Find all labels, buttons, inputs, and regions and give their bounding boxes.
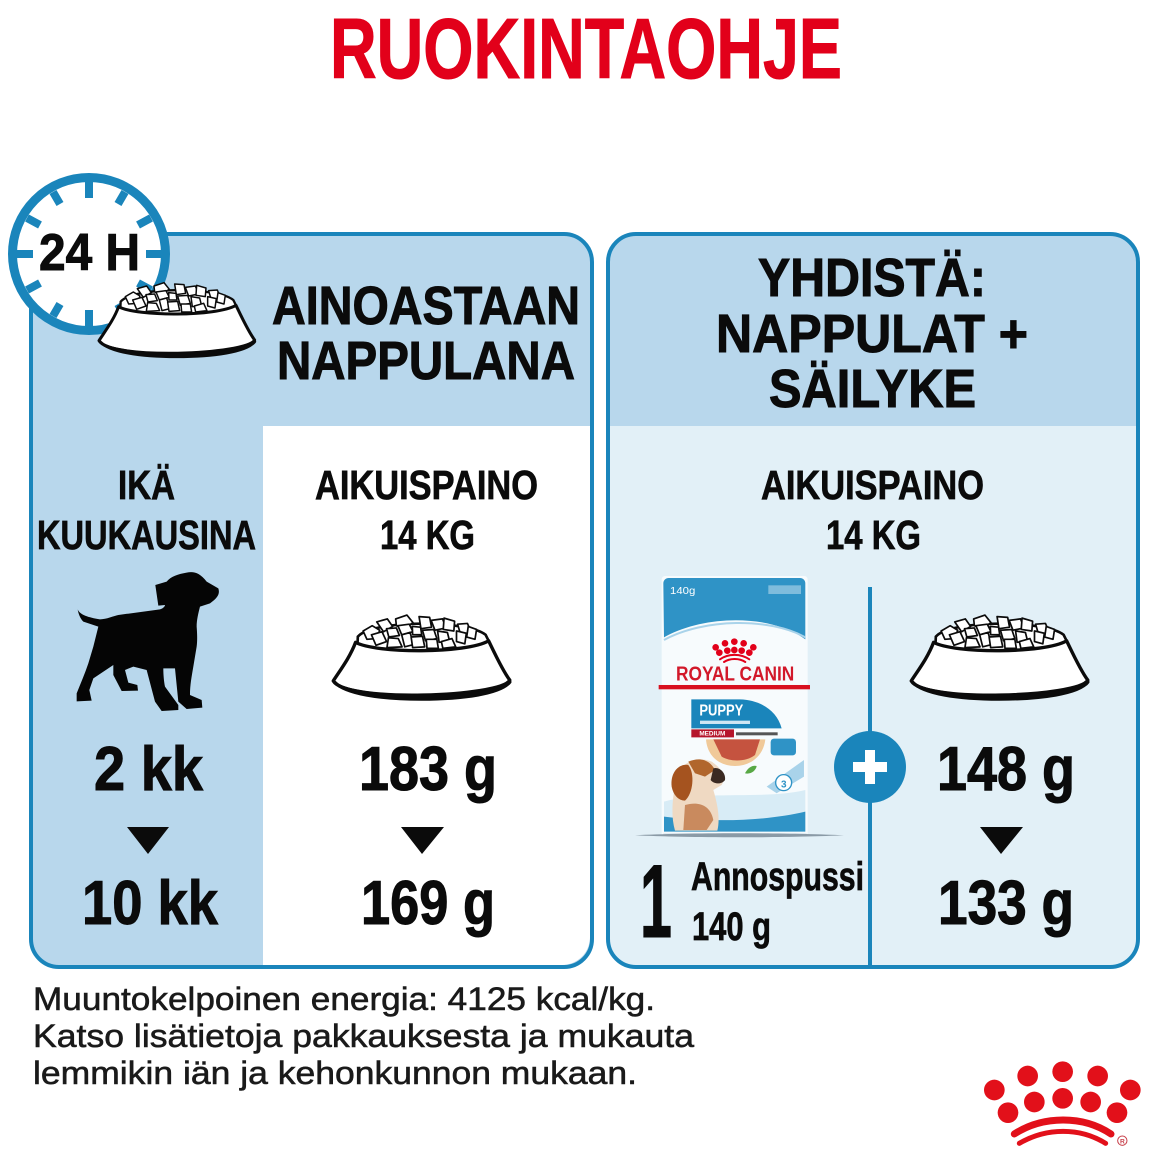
adult weight heading: mixed <box>761 462 984 558</box>
wet food pouch: ROYAL CANIN <box>676 663 794 686</box>
kibble amounts mixed <box>937 735 1075 938</box>
age values: 2 kk <box>94 735 203 804</box>
heading: mixed feeding: SÄILYKE <box>769 359 976 419</box>
pouch quantity label: 140 g <box>692 905 771 949</box>
title: RUOKINTAOHJE <box>330 2 842 97</box>
icon: food bowl mixed <box>911 615 1088 699</box>
heading: mixed feeding: NAPPULAT + <box>716 304 1028 364</box>
icon: puppy silhouette <box>77 572 219 711</box>
age values: 10 kk <box>82 869 218 938</box>
panel: kibble only <box>31 234 592 967</box>
panel: mixed feeding <box>608 234 1138 967</box>
heading: mixed feeding <box>716 248 1028 419</box>
pouch quantity label: Annospussi <box>691 855 864 899</box>
footnote text: lemmikin iän ja kehonkunnon mukaan. <box>33 1055 637 1091</box>
heading: kibble only: NAPPULANA <box>277 331 575 391</box>
wet food pouch: 140g <box>670 586 695 597</box>
kibble amounts mixed: 148 g <box>937 735 1075 804</box>
footnote text: Muuntokelpoinen energia: 4125 kcal/kg. <box>33 981 655 1017</box>
wet food pouch: 3 <box>781 779 787 790</box>
logo: royal canin crown: R <box>1120 1138 1125 1145</box>
adult weight heading: mixed: 14 KG <box>826 512 921 558</box>
heading: kibble only <box>272 276 580 391</box>
age column heading: KUUKAUSINA <box>37 512 256 558</box>
wet food pouch <box>635 576 844 837</box>
age column heading: IKÄ <box>118 462 175 508</box>
divider with plus icon <box>834 587 906 966</box>
footnote text <box>33 981 694 1091</box>
kibble amounts mixed: 133 g <box>938 869 1074 938</box>
kibble amounts: 169 g <box>361 869 495 938</box>
pouch quantity label <box>640 844 864 960</box>
kibble amounts: 183 g <box>359 735 497 804</box>
age values <box>82 735 218 938</box>
adult weight heading: kibble only: 14 KG <box>380 512 475 558</box>
pouch quantity label: 1 <box>640 844 672 960</box>
kibble amounts <box>359 735 497 938</box>
icon: 24 h clock: 24 H <box>39 224 140 282</box>
icon: small food bowl <box>99 283 255 357</box>
wet food pouch: MEDIUM <box>699 731 726 738</box>
icon: 24 h clock <box>12 178 166 330</box>
heading: mixed feeding: YHDISTÄ: <box>758 248 986 308</box>
age column heading <box>37 462 256 558</box>
adult weight heading: kibble only: AIKUISPAINO <box>315 462 538 508</box>
wet food pouch: PUPPY <box>699 702 744 719</box>
logo: royal canin crown <box>984 1061 1141 1145</box>
adult weight heading: mixed: AIKUISPAINO <box>761 462 984 508</box>
heading: kibble only: AINOASTAAN <box>272 276 580 336</box>
adult weight heading: kibble only <box>315 462 538 558</box>
icon: food bowl kibble only <box>333 615 510 699</box>
footnote text: Katso lisätietoja pakkauksesta ja mukauta <box>33 1018 694 1054</box>
